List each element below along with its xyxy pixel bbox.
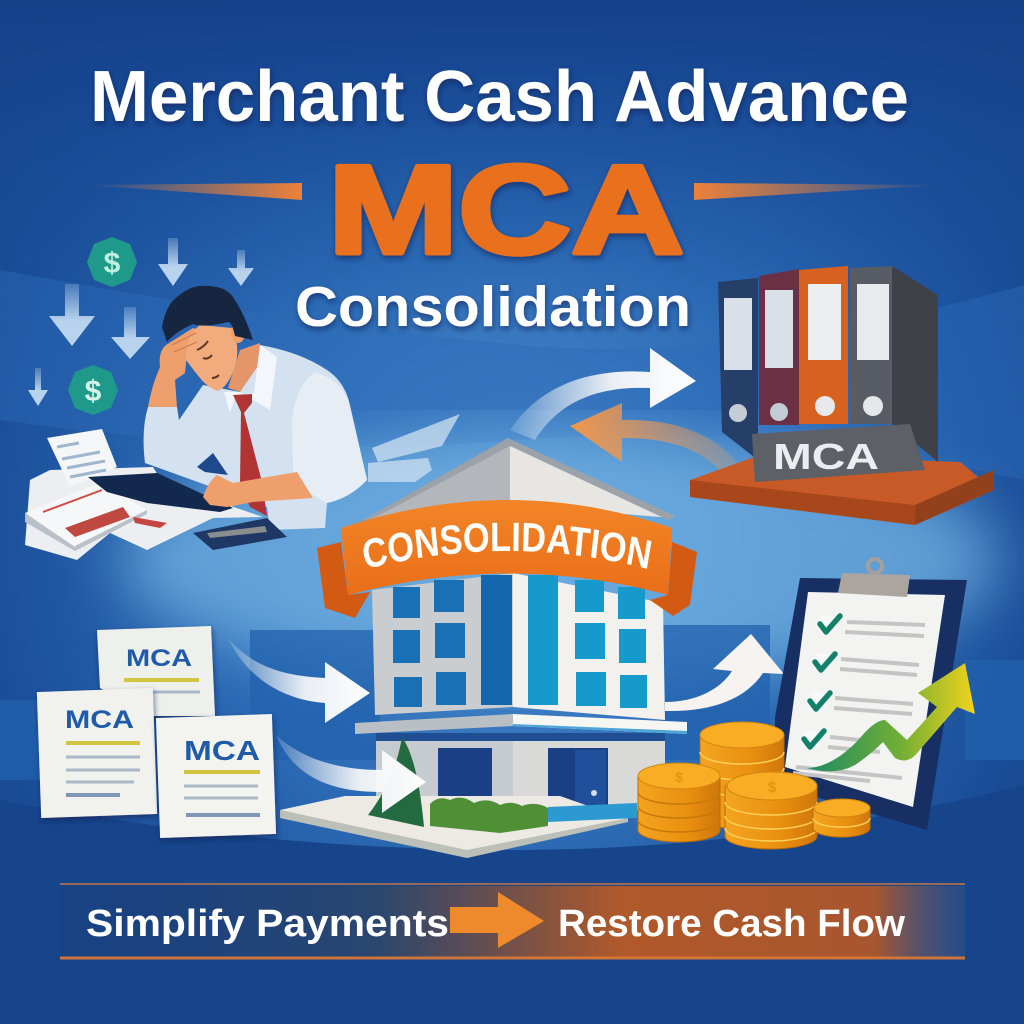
document: right MCA: MCA	[184, 735, 260, 766]
documents: MCA papers	[37, 626, 276, 838]
stack: small	[813, 799, 870, 837]
icon: falling money and arrows	[28, 237, 254, 415]
arrow: orange arrow from binders	[570, 403, 754, 500]
icon: orange arrow	[450, 892, 544, 948]
heading: Consolidation: Consolidation	[295, 275, 691, 339]
icon: falling money and arrows: $	[85, 375, 102, 408]
neck	[228, 343, 260, 392]
eye and brow	[197, 341, 219, 378]
document: right MCA	[156, 714, 276, 838]
right windows	[575, 580, 647, 708]
roof	[363, 440, 510, 520]
fingers on forehead	[172, 333, 197, 352]
tie	[233, 394, 267, 516]
stack: front: $	[768, 779, 777, 796]
footer banner	[60, 884, 965, 958]
arrow: white arrow to building lower	[276, 735, 426, 813]
right decorative rule	[694, 183, 940, 200]
document: left MCA: MCA	[65, 706, 134, 734]
sleeve	[292, 372, 367, 503]
illustration: consolidation building	[280, 438, 687, 858]
front document	[25, 483, 147, 547]
shirt	[144, 345, 367, 530]
walls	[372, 573, 513, 715]
cypress tree	[368, 737, 424, 827]
illustration: MCA binders on shelf	[690, 266, 994, 525]
illustration: MCA binders on shelf: MCA	[773, 436, 879, 477]
stack: tall back	[700, 722, 784, 829]
footer text: Restore Cash Flow: Restore Cash Flow	[558, 903, 905, 945]
plaza	[280, 796, 628, 852]
binder: navy	[718, 278, 758, 460]
document: left MCA	[37, 688, 157, 818]
banner: consolidation ribbon: CONSOLIDATION	[364, 522, 652, 569]
title: Merchant Cash Advance: Merchant Cash Advance	[90, 57, 909, 137]
document: top MCA: MCA	[126, 645, 192, 672]
gap under arm	[197, 453, 228, 475]
arrow: white arrow to binders	[510, 348, 696, 440]
clipboard board	[775, 578, 967, 830]
binder: grey	[850, 266, 892, 424]
sheet	[785, 592, 945, 807]
central blue columns	[481, 575, 512, 705]
stack: front	[725, 772, 817, 849]
steps	[548, 803, 637, 822]
raised forearm	[148, 328, 202, 407]
shelf	[690, 455, 994, 525]
footer text: Simplify Payments: Simplify Payments	[86, 903, 449, 945]
left decorative rule	[85, 183, 302, 200]
hair	[162, 286, 253, 342]
MCA plate	[752, 424, 925, 482]
collar	[224, 345, 277, 413]
papers	[25, 467, 263, 560]
document: top MCA	[97, 626, 215, 716]
illustration: gold coin stacks	[638, 722, 870, 849]
doors	[438, 748, 492, 804]
swirling loose papers	[368, 414, 460, 482]
binder: maroon	[759, 269, 799, 425]
illustration: checklist clipboard with growth arrow	[775, 559, 975, 830]
illustration: stressed businessman with paperwork	[25, 286, 460, 560]
floor ledge	[355, 714, 513, 734]
phone	[193, 518, 287, 550]
stack: left	[638, 763, 720, 842]
banner: consolidation ribbon	[317, 500, 697, 618]
stack: left: $	[675, 769, 683, 785]
tablet	[88, 473, 233, 512]
icon: falling money and arrows: $	[104, 247, 121, 280]
heading: MCA: MCA	[328, 139, 684, 280]
growth arrow	[807, 663, 975, 771]
binder: orange	[799, 266, 848, 424]
ground floor	[376, 735, 513, 810]
check items	[801, 615, 837, 750]
ear	[231, 323, 245, 343]
clip	[838, 573, 910, 597]
left windows	[393, 580, 466, 707]
hedge	[430, 798, 548, 833]
arrow: white arrow to checklist	[665, 634, 784, 711]
face	[186, 325, 237, 391]
lower hand	[203, 472, 313, 507]
arrow: white arrow to building upper	[228, 638, 370, 723]
